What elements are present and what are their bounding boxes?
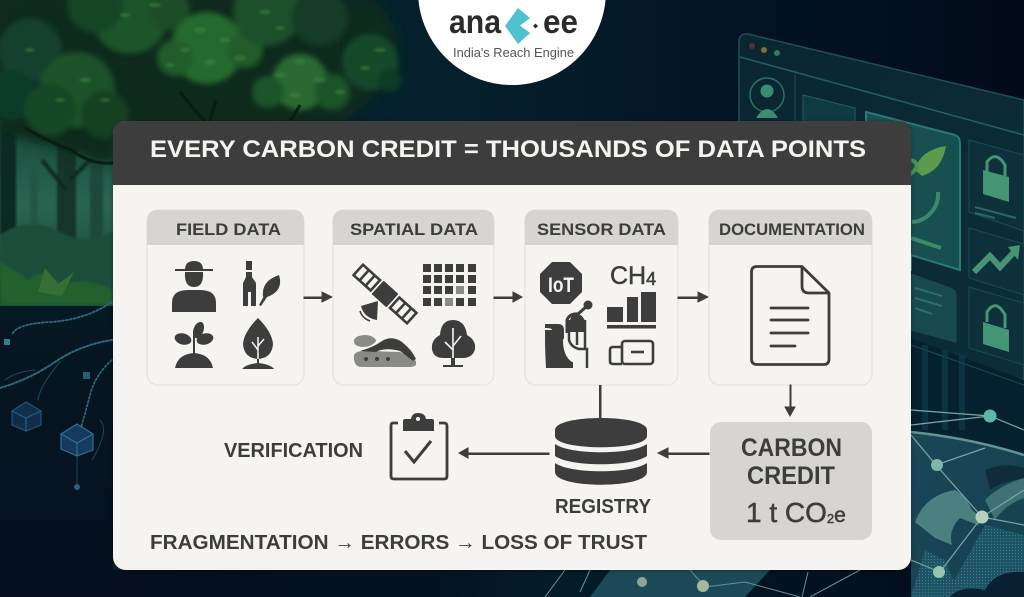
underground roots [0, 302, 563, 597]
logo mark [505, 8, 530, 44]
connector: sensor data to registry [599, 385, 602, 419]
arrow [494, 292, 522, 302]
canopy highlights [25, 2, 386, 102]
icon: tree in leaf [242, 318, 274, 369]
logo dot [533, 24, 538, 28]
unit: e [834, 504, 846, 527]
registry label: REGISTRY [555, 496, 652, 518]
icon: battery sensor [610, 341, 653, 364]
icon: sprout [173, 320, 215, 368]
carbon credit box [710, 422, 872, 540]
arrow: carbon credit to registry [658, 448, 709, 458]
icon: IoT badge [540, 262, 582, 304]
data cubes [12, 402, 93, 456]
logo wordmark left: ana [449, 3, 502, 40]
carbon credit label: CARBON [741, 434, 842, 462]
icon: tree [432, 320, 475, 367]
icon: IoT badge: IoT [548, 274, 574, 297]
icon: verification clipboard [391, 413, 447, 479]
CH4 label: 4 [646, 269, 656, 289]
logo wordmark right: ee [543, 3, 578, 40]
card: spatial data [333, 210, 494, 385]
title bar [113, 121, 911, 185]
heading: SPATIAL DATA [350, 221, 478, 239]
dashboard screen [739, 34, 1024, 597]
card: field data [147, 210, 304, 385]
icon: farmer [172, 261, 216, 312]
arrow: documentation to carbon credit [785, 385, 795, 416]
arrow: registry to verification [459, 448, 549, 458]
forest clearing [0, 120, 125, 310]
tagline: India's Reach Engine [453, 46, 574, 60]
carbon credit label: CREDIT [747, 462, 835, 490]
title: EVERY CARBON CREDIT = THOUSANDS OF DATA POINTS [150, 136, 866, 163]
icon: bar chart [607, 292, 656, 328]
footer statement: FRAGMENTATION → ERRORS → LOSS OF TRUST [150, 532, 647, 554]
unit: 2 [827, 511, 834, 526]
verification label: VERIFICATION [224, 440, 363, 462]
icon: satellite dish [360, 301, 378, 321]
logo badge [418, 0, 606, 85]
CH4 label: CH [610, 262, 646, 290]
icon: soil sensor [545, 300, 592, 368]
card: documentation [709, 210, 872, 385]
heading: FIELD DATA [176, 221, 281, 239]
tree canopy [0, 0, 402, 165]
heading: DOCUMENTATION [719, 221, 865, 239]
arrow [304, 292, 332, 302]
card: sensor data [525, 210, 678, 385]
icon: raster grid [423, 264, 476, 306]
icon: bottle and leaf [243, 261, 280, 306]
icon: terrain [354, 335, 416, 367]
arrow [678, 292, 708, 302]
globe network [545, 410, 1024, 597]
heading: SENSOR DATA [537, 221, 666, 239]
icon: document [752, 266, 829, 364]
unit: 1 t CO [746, 497, 827, 528]
icon: registry database [555, 418, 647, 485]
icon: satellite [352, 263, 418, 325]
main panel [113, 121, 911, 570]
